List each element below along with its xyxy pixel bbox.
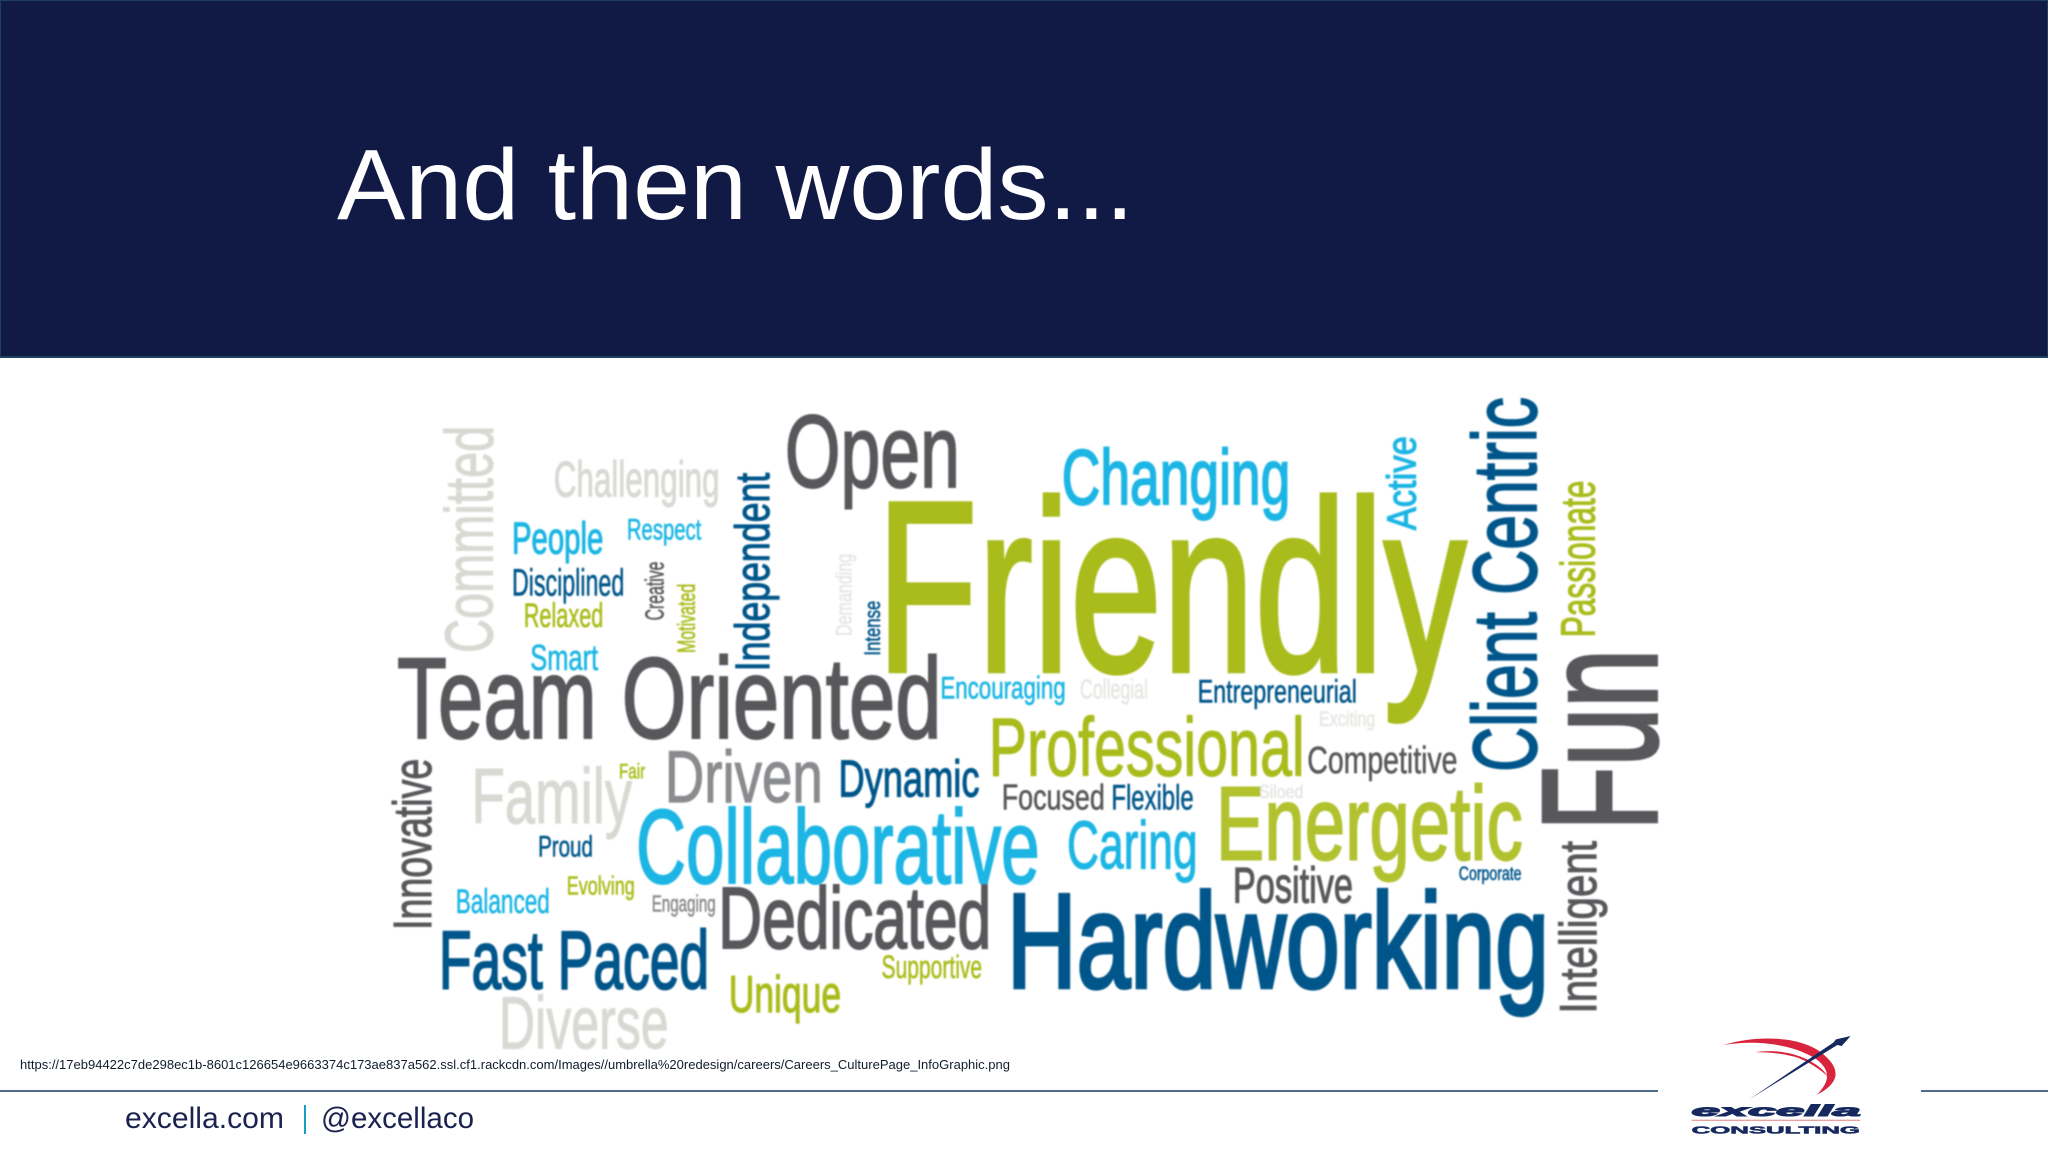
word: Motivated (vertical): Motivated [674,584,701,653]
word: Competitive: Competitive [1307,740,1457,782]
word: Flexible: Flexible [1111,779,1194,818]
word: Energetic: Energetic [1216,765,1523,882]
word: Evolving: Evolving [567,871,635,901]
word: Fast Paced: Fast Paced [439,916,709,1007]
word: Unique: Unique [729,966,841,1024]
word: Committed (vertical): Committed [432,426,507,653]
footer rule right [1921,1090,2048,1092]
word: Siloed: Siloed [1259,781,1303,802]
word: Supportive: Supportive [882,948,982,985]
logo tagline: CONSULTING [1692,1125,1861,1136]
word: Demanding (vertical): Demanding [832,554,857,636]
word: Innovative (vertical): Innovative [384,759,443,930]
word: Dedicated: Dedicated [718,869,991,967]
word: People: People [512,515,603,564]
word: Fair: Fair [619,760,645,783]
logo wordmark: excella [1692,1103,1862,1120]
word: Dynamic: Dynamic [838,751,979,809]
word: Relaxed: Relaxed [524,597,603,635]
word: Proud: Proud [538,831,593,864]
header band [0,0,2048,357]
word: Respect: Respect [627,513,702,546]
word: Focused: Focused [1002,777,1105,818]
word: Exciting: Exciting [1319,708,1375,731]
word: Smart: Smart [530,637,598,678]
word: Entrepreneurial: Entrepreneurial [1198,673,1357,710]
word: Client Centric (vertical): Client Centric [1455,397,1556,772]
word: Intelligent (vertical): Intelligent [1550,841,1608,1013]
word: Corporate: Corporate [1459,863,1522,885]
word: Creative (vertical): Creative [639,562,669,620]
word: Intense (vertical): Intense [860,601,885,656]
word: Passionate (vertical): Passionate [1552,481,1606,637]
word: Team: Team [397,635,597,763]
logo: excella consulting [1692,1036,1862,1136]
word: Professional: Professional [989,703,1305,794]
word: Friendly: Friendly [876,450,1467,723]
word: Collaborative: Collaborative [636,789,1040,906]
word: Family: Family [471,752,633,840]
logo rule [1692,1120,1860,1121]
word: Diverse: Diverse [499,982,669,1065]
word: Oriented: Oriented [622,635,942,763]
word: Balanced: Balanced [456,883,550,921]
footer handle: @excellaco [321,1102,474,1135]
word: Active (vertical): Active [1379,436,1425,530]
footer divider [304,1105,306,1134]
word: Hardworking: Hardworking [1007,865,1549,1016]
word: Challenging: Challenging [554,451,720,507]
image source URL: https://17eb94422c7de298ec1b-8601c126654e9663374c173ae837a562.ssl.cf1.rackcdn.com/Images//umbrella%20redesign/careers/Careers_CulturePage_InfoGraphic.png [20,1057,1010,1072]
word: Collegial: Collegial [1080,674,1148,705]
word: Positive: Positive [1233,857,1353,913]
word: Encouraging: Encouraging [940,671,1066,706]
title: And then words... [337,129,1134,241]
word: Disciplined: Disciplined [512,563,624,605]
word: Caring: Caring [1067,808,1198,883]
word: Fun (vertical): Fun [1508,649,1691,831]
word: Open: Open [785,394,960,509]
footer rule left [0,1090,1658,1092]
word: Engaging: Engaging [652,891,716,917]
logo swoosh inner [1755,1051,1828,1077]
footer website: excella.com [125,1102,284,1135]
word: Changing: Changing [1062,433,1290,521]
word: Driven: Driven [665,737,823,818]
logo swoosh outer [1723,1038,1836,1095]
word: Independent (vertical): Independent [726,472,780,671]
word cloud [384,394,1691,1065]
logo arrow [1749,1036,1851,1099]
